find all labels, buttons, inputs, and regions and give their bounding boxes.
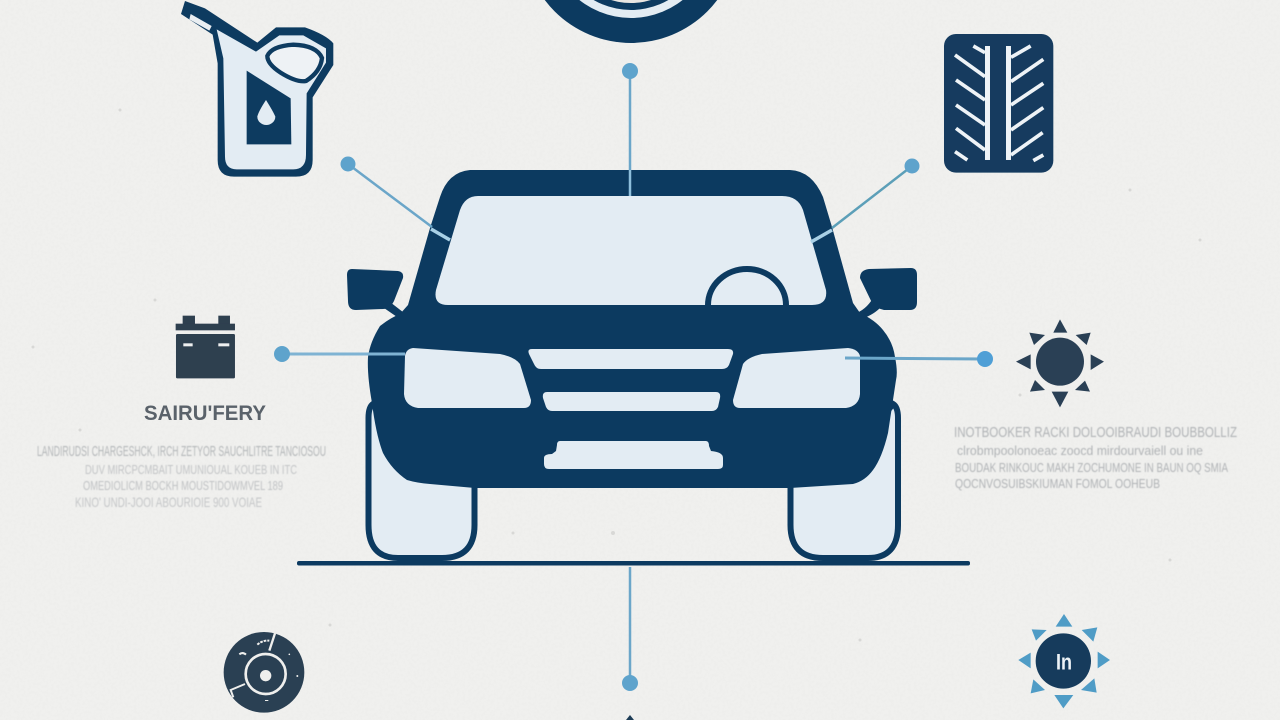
text block: right description bbox=[954, 424, 1237, 491]
upper grille bbox=[528, 349, 733, 369]
steering wheel arc bbox=[708, 269, 786, 305]
left headlight bbox=[404, 348, 531, 408]
heading: battery: SAIRU'FERY bbox=[144, 402, 266, 425]
icon: small arrow tip at bottom bbox=[626, 715, 634, 720]
text block: battery description bbox=[37, 443, 326, 510]
connector: upper left bbox=[340, 156, 450, 240]
connector: upper right bbox=[811, 158, 920, 242]
icon: sun badge bottom right: In bbox=[1056, 649, 1072, 674]
middle grille bbox=[543, 392, 720, 411]
right wheel bbox=[790, 404, 898, 558]
icon: tire tread bbox=[944, 34, 1053, 173]
connector: top bbox=[622, 63, 638, 196]
icon: tire at top bbox=[523, 0, 739, 43]
icon: sun gauge right bbox=[1016, 319, 1104, 407]
icon: oil can bbox=[181, 1, 333, 177]
ground line bbox=[297, 561, 970, 566]
windshield bbox=[436, 196, 826, 305]
text block: battery description: DUV MIRCPCMBAIT UMUNIOUAL KOUEB IN ITC bbox=[85, 462, 297, 477]
icon: sun badge bottom right bbox=[1018, 614, 1110, 708]
text block: battery description: KINO' UNDI-JOOI ABOURIOIE 900 VOIAE bbox=[75, 494, 262, 510]
icon: battery bbox=[176, 316, 235, 378]
icon: brake disc bbox=[224, 632, 304, 713]
car front illustration bbox=[347, 170, 917, 558]
right headlight bbox=[733, 348, 860, 408]
text block: battery description: OMEDIOLICM BOCKH MOUSTIDOWMVEL 189 bbox=[83, 478, 283, 493]
left wheel bbox=[368, 404, 474, 558]
right mirror bbox=[854, 268, 917, 320]
connector: right bbox=[845, 351, 993, 367]
text block: right description: QOCNVOSUIBSKIUMAN FOMOL OOHEUB bbox=[955, 476, 1160, 491]
left mirror bbox=[347, 269, 408, 319]
car body bbox=[368, 170, 897, 488]
connector: bottom bbox=[622, 567, 638, 691]
lower grille bbox=[544, 441, 723, 469]
text block: right description: clrobmpoolonoeac zoocd mirdourvaiell ou ine bbox=[957, 443, 1203, 458]
text block: battery description: LANDIRUDSI CHARGESHCK, IRCH ZETYOR SAUCHLITRE TANCIOSOU bbox=[37, 443, 326, 460]
connector: left bbox=[274, 346, 405, 362]
